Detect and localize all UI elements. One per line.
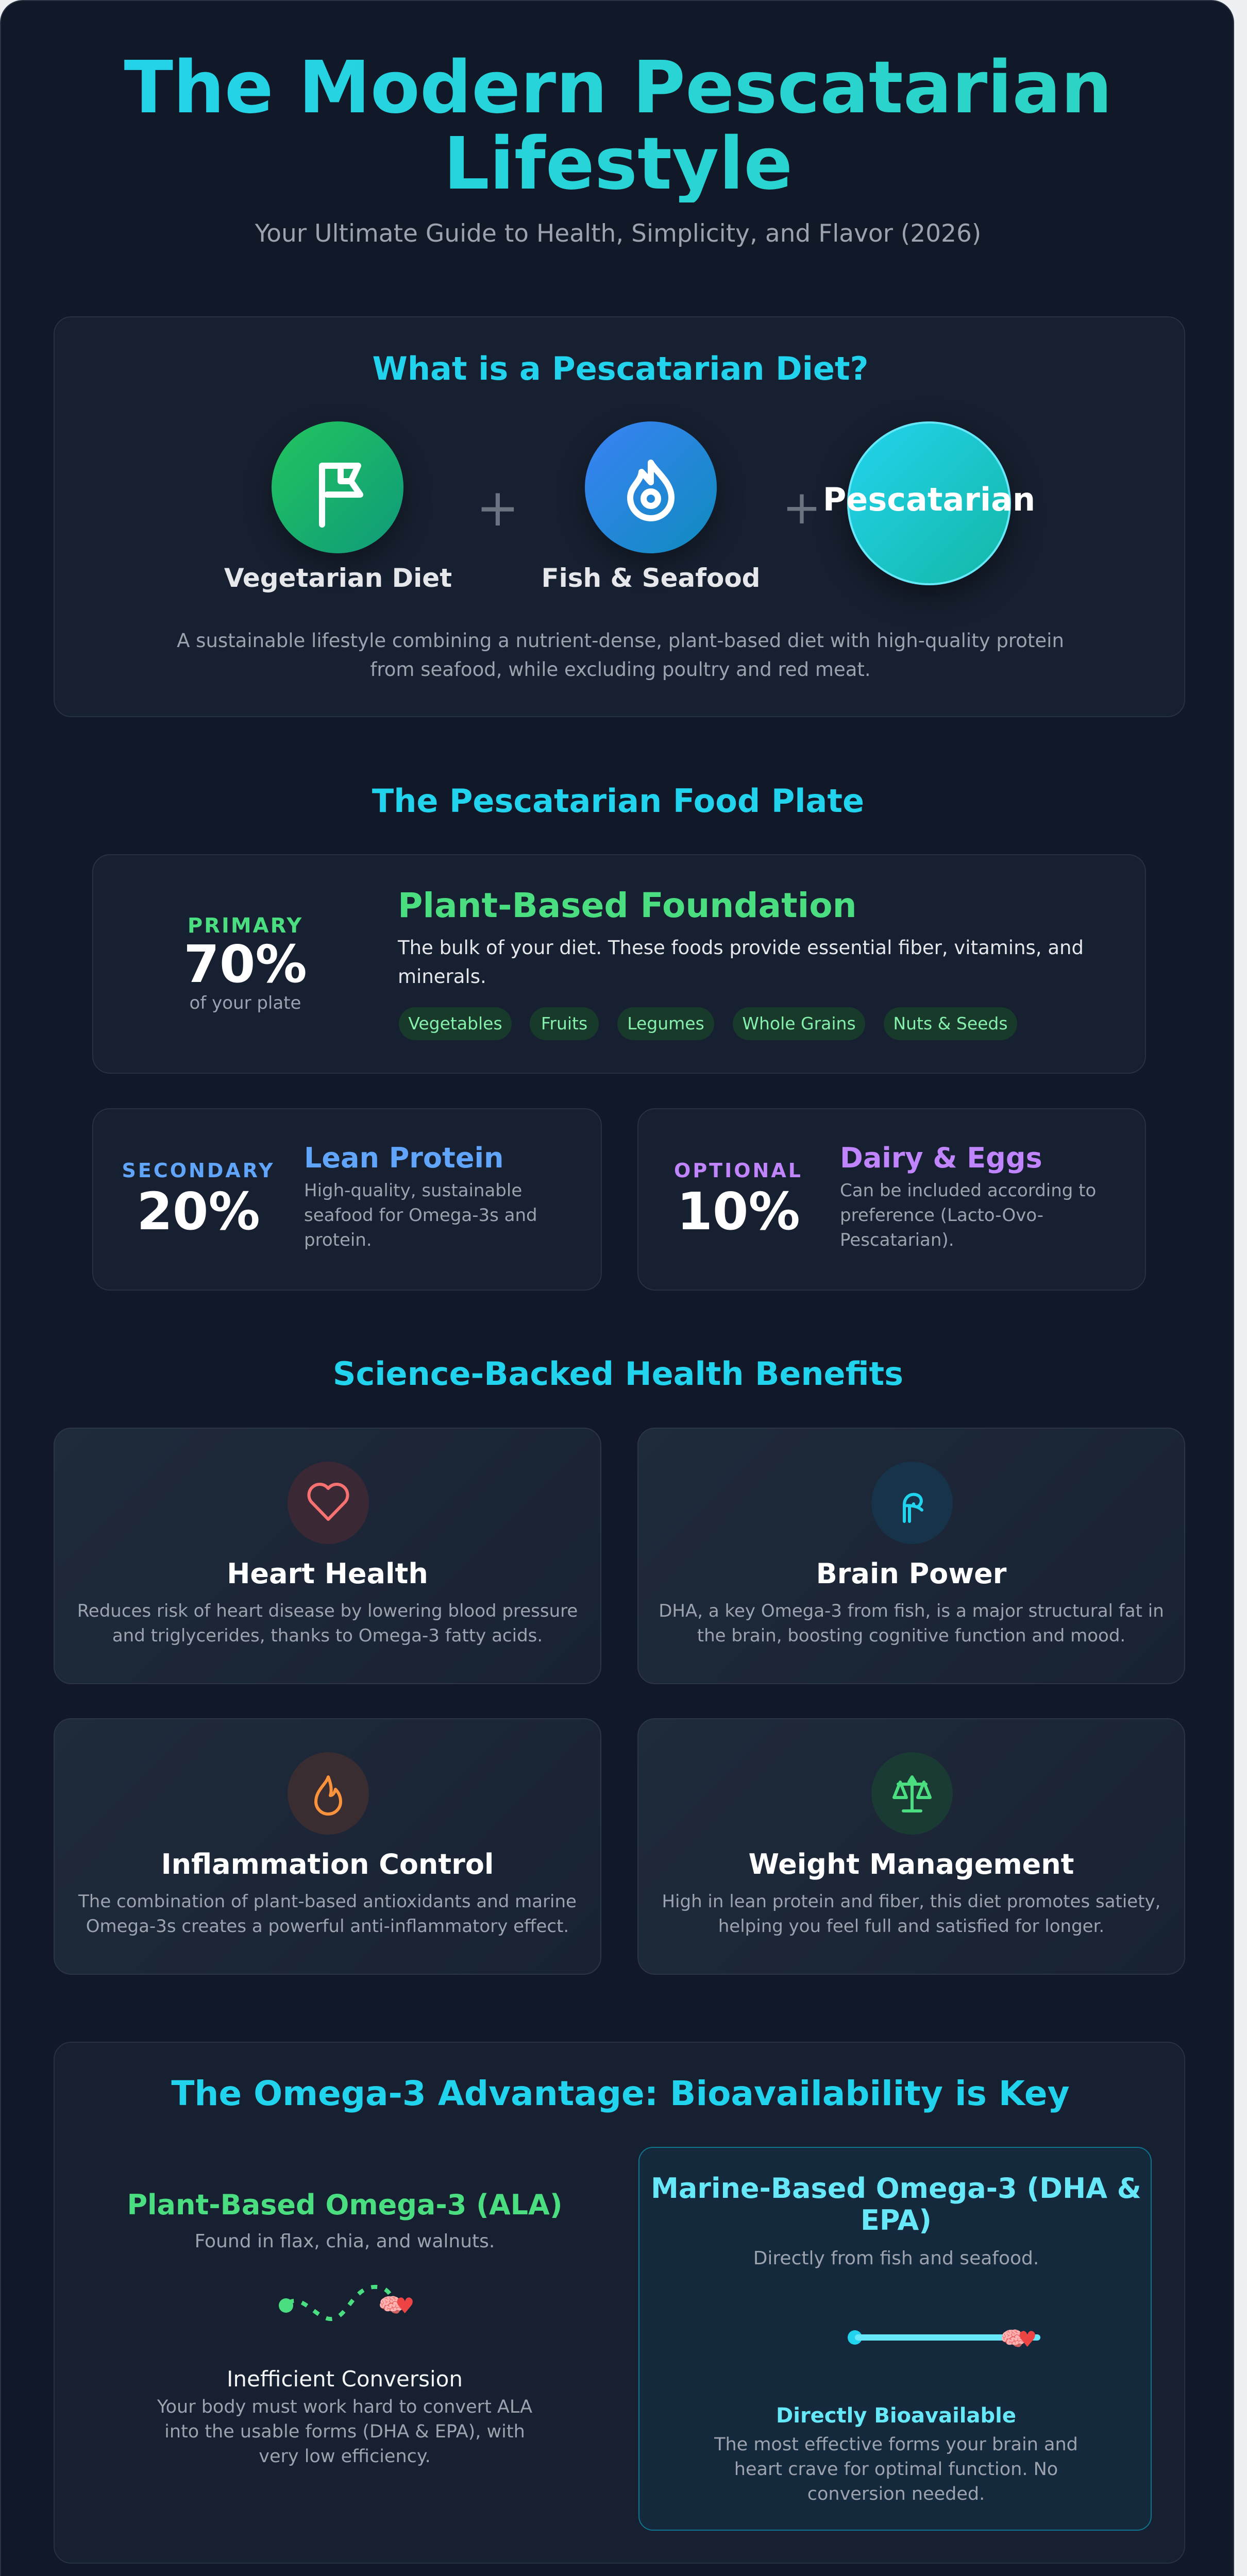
icon: scale: [871, 1752, 953, 1835]
diagram: direct path: [848, 2327, 1040, 2352]
card: heart health: [54, 1428, 601, 1684]
text: lean protein: [304, 1142, 537, 1250]
card: brain power: DHA, a key Omega-3 from fish, is a major structural fat in: [659, 1601, 1164, 1621]
card: weight management: helping you feel full and satisfied for longer.: [718, 1916, 1104, 1937]
text: dairy & eggs: [840, 1142, 1096, 1250]
description: A sustainable lifestyle combining a nutrient-dense, plant-based diet with high-quality protein from seafood, while excluding poultry and red meat.: [177, 630, 1064, 681]
stat: 10%: OPTIONAL: [674, 1159, 803, 1182]
label: fish & seafood: Fish & Seafood: [541, 563, 760, 593]
heading: food plate: The Pescatarian Food Plate: [372, 782, 864, 820]
icon: vegetarian circle: [272, 421, 403, 553]
icon: brain: [871, 1462, 953, 1544]
plus: +: [476, 478, 519, 538]
subtitle: Your Ultimate Guide to Health, Simplicity, and Flavor (2026): [255, 219, 981, 248]
title: Lifestyle: [444, 122, 793, 206]
column: plant-based ALA: Plant-Based Omega-3 (ALA): [127, 2189, 563, 2221]
card: heart health: and triglycerides, thanks to Omega-3 fatty acids.: [112, 1625, 543, 1646]
text: lean protein: Lean Protein: [304, 1142, 503, 1174]
result circle: pescatarian: [847, 421, 1011, 585]
page card: Whole Grains: [742, 1013, 856, 1033]
title: [1, 50, 1235, 202]
page card: Nuts & Seeds: [893, 1013, 1008, 1033]
diagram: squiggly conversion path: 🧠: [378, 2294, 404, 2317]
text: plant-based foundation: The bulk of your diet. These foods provide essential fiber, vitamins, and minerals.: [398, 937, 1084, 988]
stat: 10%: 10%: [677, 1181, 800, 1242]
column: plant-based ALA: [127, 2189, 563, 2467]
stat: 20%: 20%: [137, 1181, 260, 1242]
tags: [399, 1007, 1017, 1040]
diagram: direct path: 🧠: [1000, 2327, 1026, 2351]
card: weight management: Weight Management: [749, 1848, 1074, 1880]
card: brain power: [637, 1428, 1185, 1684]
column: marine-based DHA & EPA: [638, 2147, 1152, 2531]
stat: 70%: PRIMARY: [188, 914, 303, 938]
column: marine-based DHA & EPA: Directly from fish and seafood.: [753, 2248, 1039, 2269]
icon: seafood circle: [585, 421, 717, 553]
panel: omega-3 advantage: [54, 2042, 1185, 2564]
diagram: direct path: ♥: [1018, 2327, 1037, 2352]
page card: Fruits: [541, 1013, 587, 1033]
column: plant-based ALA: Your body must work hard to convert ALA into the usable forms (DHA & EPA), with very low efficiency.: [157, 2397, 532, 2467]
card: inflammation control: [54, 1718, 601, 1975]
card: weight management: High in lean protein and fiber, this diet promotes satiety,: [662, 1891, 1160, 1912]
panel: secondary 20%: [92, 1108, 602, 1291]
column: marine-based DHA & EPA: The most effective forms your brain and heart crave for optimal function. No conversion needed.: [714, 2434, 1078, 2504]
card: inflammation control: Inflammation Control: [161, 1848, 494, 1880]
card: weight management: [637, 1718, 1185, 1975]
column: plant-based ALA: Inefficient Conversion: [227, 2366, 463, 2392]
page card: Vegetables: [408, 1013, 502, 1033]
column: plant-based ALA: Found in flax, chia, and walnuts.: [195, 2231, 495, 2252]
label: vegetarian diet: Vegetarian Diet: [224, 563, 452, 593]
page card: Legumes: [627, 1013, 704, 1033]
stat: 20%: SECONDARY: [122, 1159, 275, 1182]
card: heart health: Heart Health: [227, 1557, 428, 1590]
stat: 70%: 70%: [183, 934, 307, 994]
panel: optional 10%: [637, 1108, 1146, 1291]
card: inflammation control: Omega-3s creates a powerful anti-inflammatory effect.: [86, 1916, 569, 1937]
stat: 70%: of your plate: [190, 993, 301, 1013]
text: lean protein: High-quality, sustainable seafood for Omega-3s and protein.: [304, 1180, 537, 1250]
diagram: squiggly conversion path: ♥: [395, 2293, 415, 2318]
heading: The Omega-3 Advantage: Bioavailability is Key: [171, 2074, 1070, 2113]
text: plant-based foundation: [398, 886, 1084, 988]
card: brain power: the brain, boosting cognitive function and mood.: [697, 1625, 1125, 1646]
text: plant-based foundation: Plant-Based Foundation: [398, 886, 857, 925]
diagram: squiggly conversion path: [279, 2284, 415, 2321]
card: heart health: Reduces risk of heart disease by lowering blood pressure: [77, 1601, 578, 1621]
stat: 70%: [183, 914, 307, 1013]
column: marine-based DHA & EPA: Marine-Based Omega-3 (DHA & EPA): [651, 2172, 1141, 2236]
plus: +: [782, 481, 821, 535]
stat: 20%: [122, 1159, 275, 1242]
panel: what is a pescatarian diet: [54, 316, 1185, 717]
card: brain power: Brain Power: [816, 1557, 1006, 1590]
result circle: pescatarian: Pescatarian: [823, 481, 1035, 518]
heading: What is a Pescatarian Diet?: [373, 350, 868, 387]
heading: benefits: Science-Backed Health Benefits: [333, 1355, 903, 1393]
title: The Modern Pescatarian: [124, 46, 1112, 130]
card: inflammation control: The combination of plant-based antioxidants and marine: [78, 1891, 577, 1912]
text: dairy & eggs: Dairy & Eggs: [840, 1142, 1042, 1174]
icon: flame: [288, 1752, 369, 1835]
text: dairy & eggs: Can be included according to preference (Lacto-Ovo-Pescatarian).: [840, 1180, 1096, 1250]
icon: heart: [288, 1462, 369, 1544]
column: marine-based DHA & EPA: Directly Bioavailable: [776, 2404, 1016, 2428]
panel: primary 70%: [92, 854, 1146, 1074]
